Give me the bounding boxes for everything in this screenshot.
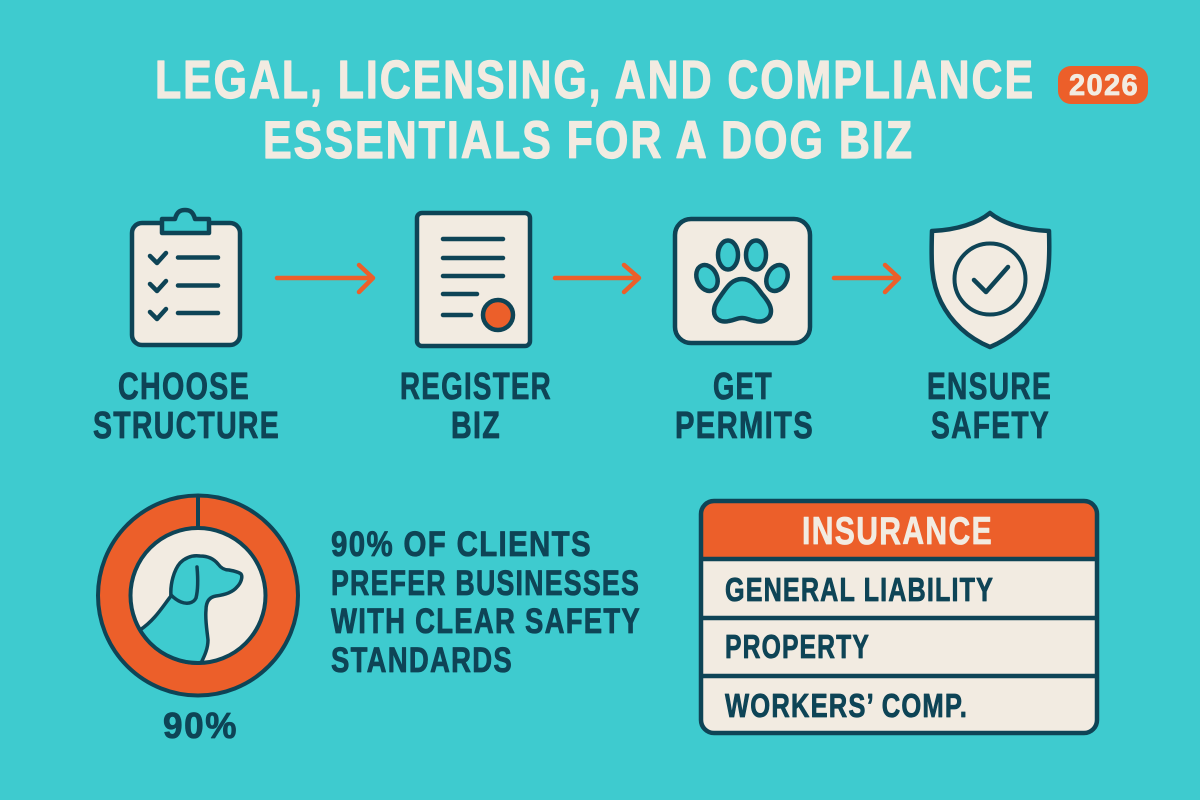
table header: [701, 501, 1097, 559]
panel: insurance table: [701, 501, 1097, 733]
dog silhouette: [140, 556, 242, 663]
icon: safety shield: [932, 213, 1049, 347]
row: general liability: GENERAL LIABILITY: [725, 571, 994, 608]
statistic text: 90% OF CLIENTS: [331, 525, 592, 564]
step label: ensure safety: ENSURE: [927, 366, 1052, 408]
title: [155, 50, 1035, 170]
icon: paw print permit: [675, 219, 810, 343]
step label: register biz: [400, 366, 552, 447]
icon: clipboard checklist: [132, 210, 240, 345]
donut chart: 90 percent with dog: [98, 495, 298, 696]
row: workers' comp: WORKERS’ COMP.: [725, 687, 968, 724]
step label: register biz: REGISTER: [400, 366, 552, 408]
step label: get permits: PERMITS: [675, 405, 814, 447]
step label: choose structure: STRUCTURE: [93, 405, 280, 447]
statistic text: STANDARDS: [331, 641, 513, 680]
year badge: [1058, 66, 1148, 104]
arrow: register to permits: [555, 265, 639, 292]
icon: registration document with seal: [417, 213, 530, 346]
arrow: structure to register: [277, 265, 373, 292]
statistic text: PREFER BUSINESSES: [331, 564, 640, 603]
step label: get permits: GET: [713, 366, 773, 408]
step label: choose structure: [93, 366, 280, 447]
step label: choose structure: CHOOSE: [118, 366, 250, 408]
step label: ensure safety: [927, 366, 1052, 447]
donut value: 90%: [163, 705, 238, 746]
step label: register biz: BIZ: [451, 405, 501, 447]
statistic text: [331, 525, 641, 680]
row: property: PROPERTY: [725, 628, 870, 665]
title: ESSENTIALS FOR A DOG BIZ: [263, 111, 914, 170]
arrow: permits to safety: [834, 265, 899, 292]
step label: ensure safety: SAFETY: [931, 405, 1050, 447]
year badge: 2026: [1069, 69, 1139, 102]
step label: get permits: [675, 366, 814, 447]
statistic text: WITH CLEAR SAFETY: [331, 602, 641, 641]
header text: INSURANCE: [802, 510, 993, 553]
